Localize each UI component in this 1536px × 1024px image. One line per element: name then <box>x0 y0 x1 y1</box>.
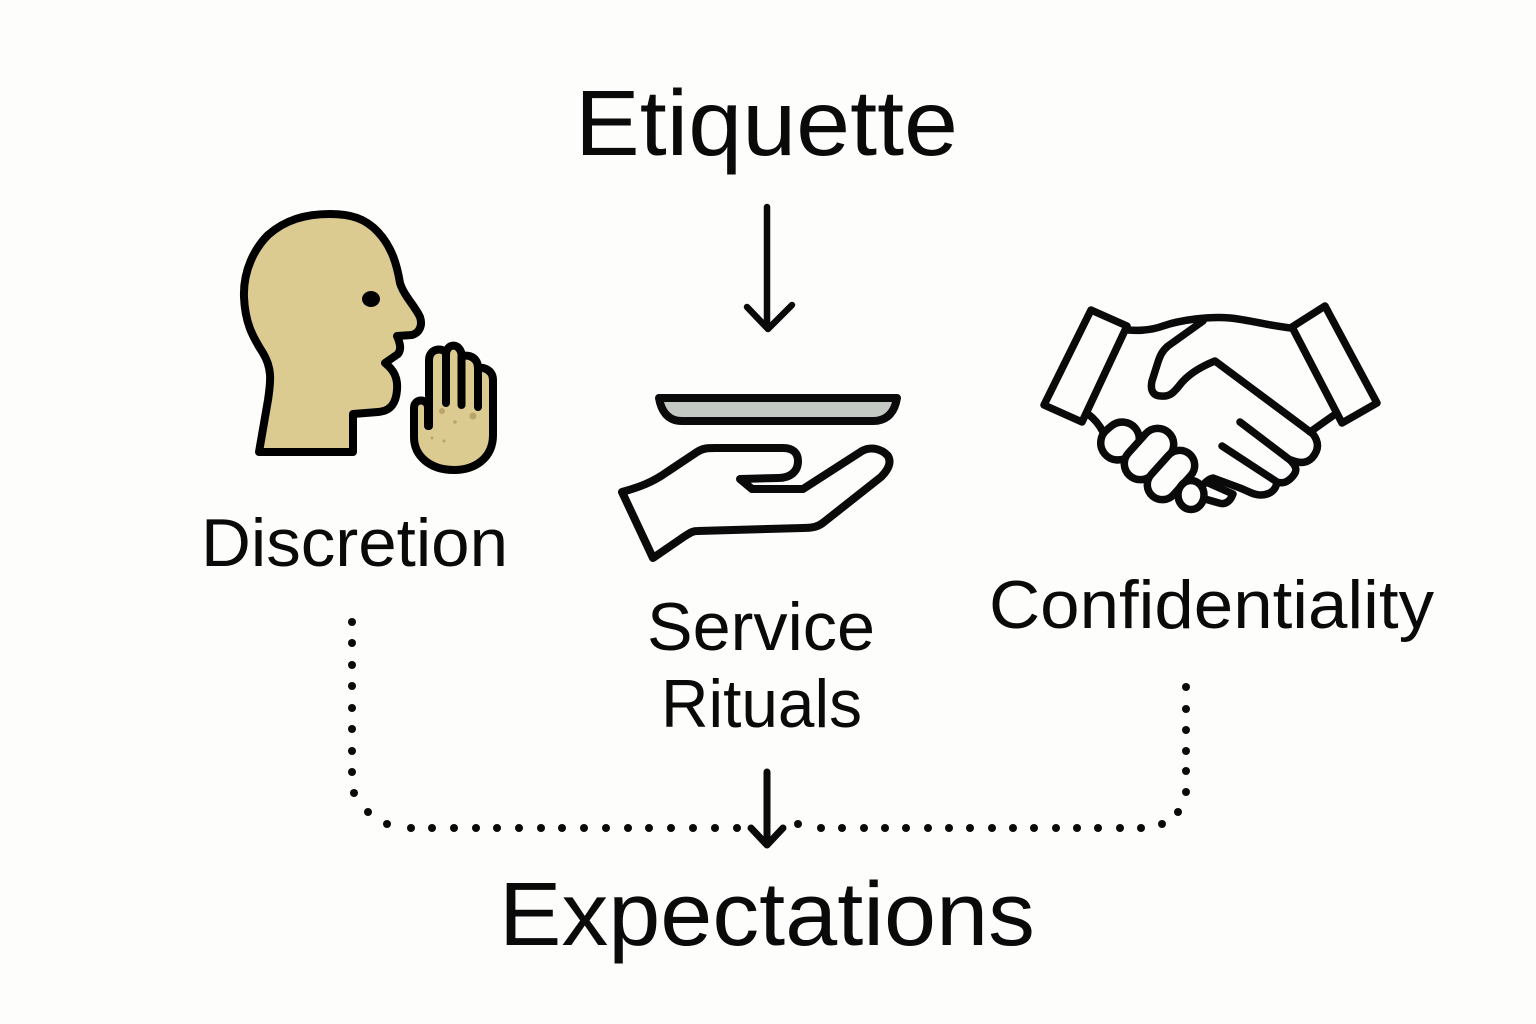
heading: Expectations: Expectations <box>499 865 1035 965</box>
right cuff <box>1292 306 1377 423</box>
eye <box>362 291 380 307</box>
connector: dotted line from Confidentiality <box>794 683 1190 832</box>
icon: handshake <box>1044 306 1377 510</box>
label: Service Rituals: Service <box>647 589 875 665</box>
label: Discretion: Discretion <box>201 505 508 581</box>
raised hand <box>414 346 493 470</box>
arrow: Service Rituals to Expectations <box>751 772 783 845</box>
left cuff <box>1044 310 1127 422</box>
icon: whispering head with raised hand <box>244 214 493 470</box>
connector: dotted line from Discretion <box>348 618 741 832</box>
arrow: Etiquette to service <box>747 207 792 329</box>
title: Etiquette: Etiquette <box>575 71 958 175</box>
thumb and back of hand <box>1151 321 1317 462</box>
label: Service Rituals <box>647 589 875 742</box>
hand speckles <box>430 408 476 442</box>
top of hands <box>1128 317 1291 330</box>
fingers <box>1094 415 1146 467</box>
open hand <box>622 448 890 558</box>
label: Confidentiality: Confidentiality <box>989 567 1434 643</box>
finger creases <box>1204 422 1296 495</box>
tray <box>659 398 897 421</box>
finger gaps <box>446 352 478 407</box>
icon: tray on open hand <box>622 398 897 558</box>
head <box>244 214 421 452</box>
label: Service Rituals: Rituals <box>661 666 862 742</box>
wrist connectors <box>1088 414 1334 432</box>
